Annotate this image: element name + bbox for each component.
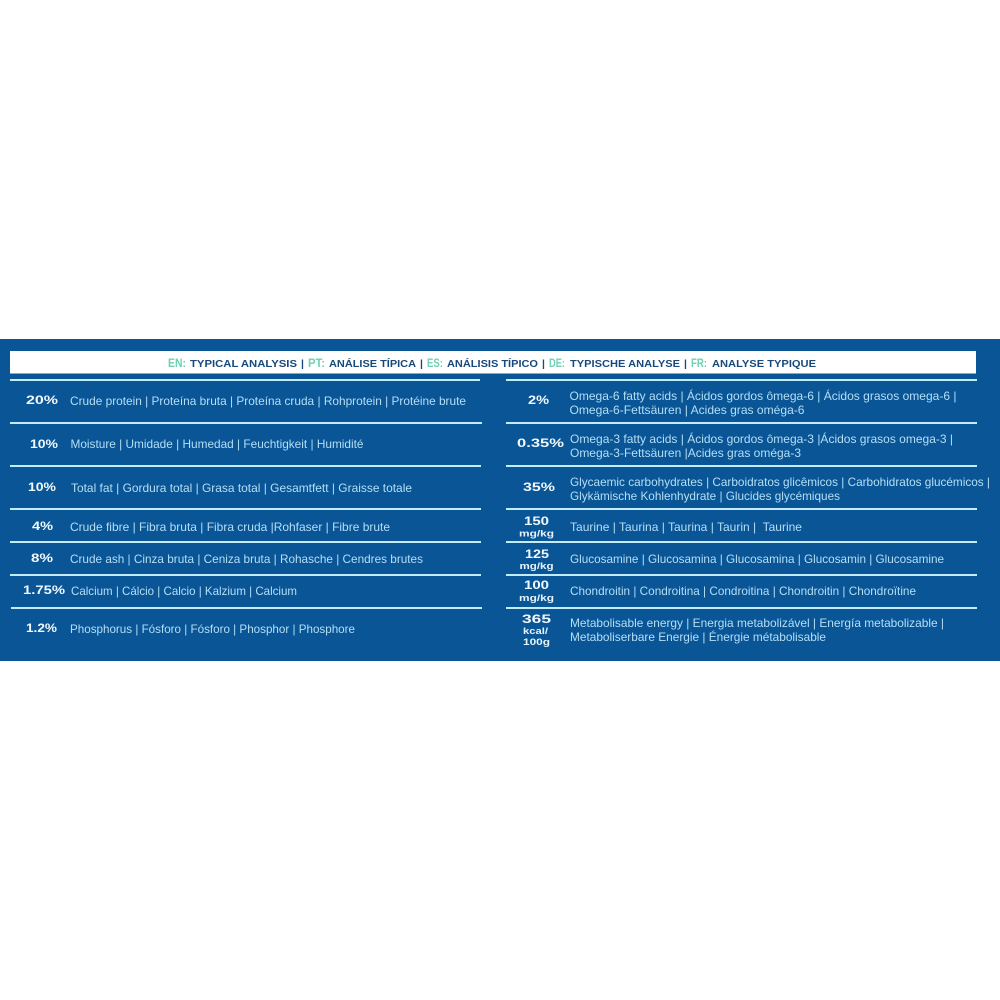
row: omega-3: 0.35% <box>517 438 564 450</box>
row: chondroitin <box>519 580 916 604</box>
row: taurine: Taurine | Taurina | Taurina | Taurin | Taurine <box>570 520 802 534</box>
heading: multilingual typical analysis bar: | <box>420 358 423 370</box>
row: omega-3 <box>517 431 953 460</box>
heading: multilingual typical analysis bar: PT: <box>308 358 325 370</box>
row: glycaemic carbohydrates: Glycaemic carbohydrates | Carboidratos glicêmicos | Carbohidratos glucémicos | <box>570 475 990 489</box>
row: glycaemic carbohydrates: Glykämische Kohlenhydrate | Glucides glycémiques <box>570 489 840 503</box>
heading: multilingual typical analysis bar: TYPICAL ANALYSIS <box>190 358 297 370</box>
heading: multilingual typical analysis bar: | <box>301 358 304 370</box>
heading: multilingual typical analysis bar: FR: <box>691 358 707 370</box>
row: total fat: Total fat | Gordura total | Grasa total | Gesamtfett | Graisse totale <box>71 481 412 495</box>
heading: multilingual typical analysis bar: ANÁLISE TÍPICA <box>329 357 416 370</box>
row: metabolisable energy: 100g <box>523 637 550 648</box>
row: chondroitin: Chondroitin | Condroitina | Condroitina | Chondroitin | Chondroïtine <box>570 584 916 598</box>
row: crude fibre: 4% <box>32 521 53 533</box>
heading: multilingual typical analysis bar: ANALYSE TYPIQUE <box>712 358 816 370</box>
row: omega-6: 2% <box>528 395 549 407</box>
row: crude fibre: Crude fibre | Fibra bruta | Fibra cruda |Rohfaser | Fibre brute <box>70 520 390 534</box>
row: chondroitin: 100 <box>524 580 549 592</box>
row: glucosamine: Glucosamine | Glucosamina | Glucosamina | Glucosamin | Glucosamine <box>570 552 944 566</box>
row: omega-3: Omega-3 fatty acids | Ácidos gordos ômega-3 |Ácidos grasos omega-3 | <box>570 431 953 446</box>
row: metabolisable energy: kcal/ <box>523 626 548 637</box>
heading: multilingual typical analysis bar: ANÁLISIS TÍPICO <box>447 357 538 370</box>
panel: blue analysis band <box>0 339 1000 661</box>
row: glycaemic carbohydrates <box>523 475 990 503</box>
row: total fat: 10% <box>28 482 56 494</box>
row: metabolisable energy: Metabolisable energy | Energia metabolizável | Energía metabolizable | <box>570 616 944 630</box>
row: glycaemic carbohydrates: 35% <box>523 482 555 494</box>
heading: multilingual typical analysis bar: EN: <box>168 358 186 370</box>
row: glucosamine <box>520 549 944 572</box>
row: taurine <box>519 516 802 540</box>
row: moisture: 10% <box>30 439 58 451</box>
heading: multilingual typical analysis bar: DE: <box>549 358 565 370</box>
heading: multilingual typical analysis bar <box>10 351 976 374</box>
row: glucosamine: 125 <box>525 549 550 561</box>
row: omega-6: Omega-6-Fettsäuren | Acides gras oméga-6 <box>570 403 805 417</box>
row: moisture: Moisture | Umidade | Humedad | Feuchtigkeit | Humidité <box>70 437 364 451</box>
heading: multilingual typical analysis bar: | <box>684 358 687 370</box>
row: calcium: 1.75% <box>23 585 65 597</box>
row: glucosamine: mg/kg <box>520 561 554 572</box>
row: chondroitin: mg/kg <box>519 593 554 604</box>
heading: multilingual typical analysis bar: TYPISCHE ANALYSE <box>570 358 680 370</box>
row: phosphorus: Phosphorus | Fósforo | Fósforo | Phosphor | Phosphore <box>70 622 355 636</box>
row: metabolisable energy <box>522 614 944 648</box>
row: omega-3: Omega-3-Fettsäuren |Acides gras oméga-3 <box>570 446 801 460</box>
heading: multilingual typical analysis bar: | <box>542 358 545 370</box>
row: taurine: mg/kg <box>519 528 554 540</box>
row: taurine: 150 <box>524 516 549 528</box>
row: crude protein: Crude protein | Proteína bruta | Proteína cruda | Rohprotein | Protéine brute <box>70 394 466 408</box>
row: omega-6 <box>528 388 956 417</box>
row: omega-6: Omega-6 fatty acids | Ácidos gordos ômega-6 | Ácidos grasos omega-6 | <box>570 388 956 403</box>
row: crude ash: 8% <box>31 553 53 565</box>
heading: multilingual typical analysis bar: ES: <box>427 358 443 370</box>
row: phosphorus: 1.2% <box>26 623 57 635</box>
row: crude protein: 20% <box>26 395 58 407</box>
row: metabolisable energy: Metaboliserbare Energie | Énergie métabolisable <box>570 629 826 644</box>
row: crude ash: Crude ash | Cinza bruta | Ceniza bruta | Rohasche | Cendres brutes <box>70 552 423 566</box>
row: metabolisable energy: 365 <box>522 614 552 626</box>
row: calcium: Calcium | Cálcio | Calcio | Kalzium | Calcium <box>71 584 297 598</box>
